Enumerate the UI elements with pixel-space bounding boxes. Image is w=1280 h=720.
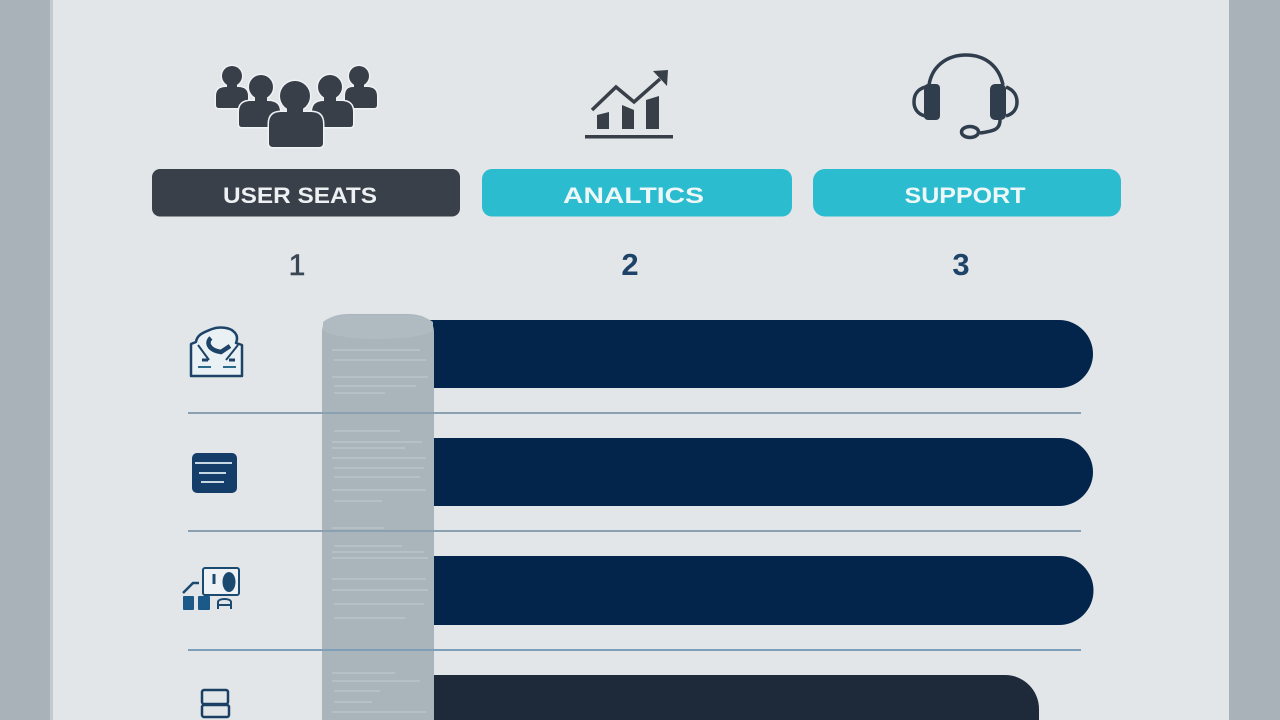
icon: analytics chart xyxy=(585,70,673,138)
label: user seats: USER SEATS xyxy=(223,183,377,208)
bar: row 3 xyxy=(430,556,1094,625)
icon: user group xyxy=(216,66,377,147)
bar: row 1 xyxy=(430,320,1093,388)
label: user seats xyxy=(152,169,460,216)
bar: row 4 xyxy=(430,675,1039,720)
grey overlay column xyxy=(322,314,434,720)
label: analytics xyxy=(482,169,792,216)
icon: stacked boxes xyxy=(202,690,229,717)
icon: envelope xyxy=(191,328,242,376)
icon: headset xyxy=(914,55,1017,138)
bar: row 2 xyxy=(430,438,1093,506)
label: support xyxy=(813,169,1121,216)
number 3: 3 xyxy=(952,247,970,282)
divider lines xyxy=(188,413,1081,650)
number 2: 2 xyxy=(621,247,639,282)
icon: document card xyxy=(192,453,237,493)
number 1: 1 xyxy=(289,249,305,282)
label: analytics: ANALTICS xyxy=(563,183,704,208)
label: support: SUPPORT xyxy=(904,183,1026,208)
icon: device cluster xyxy=(183,568,239,610)
